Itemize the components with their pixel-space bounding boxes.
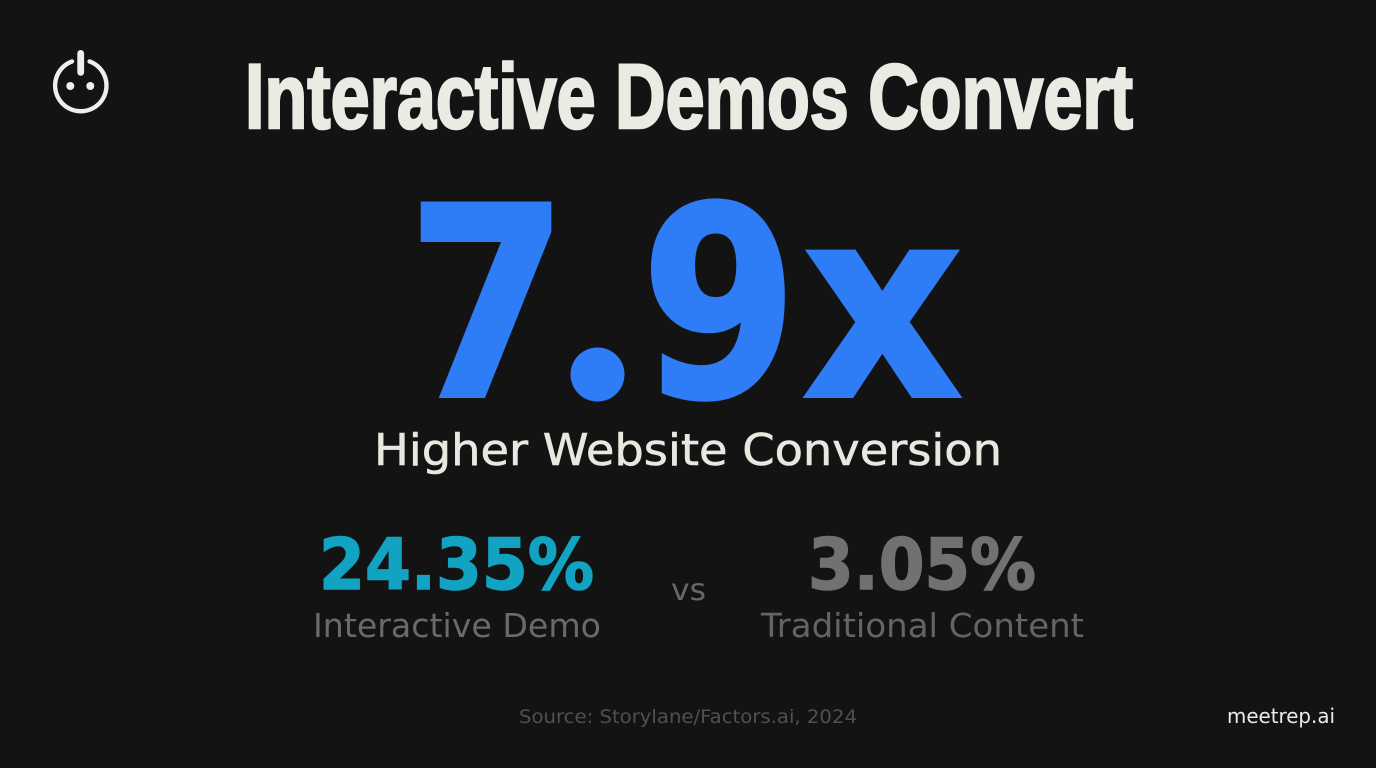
main statistic [407, 152, 962, 459]
vs label: vs [671, 573, 706, 608]
interactive demo value: 24.35% [319, 524, 594, 606]
title: Interactive Demos Convert [245, 46, 1133, 148]
source note: Source: Storylane/Factors.ai, 2024 [519, 706, 857, 728]
icon: power symbol with two dots [55, 50, 106, 111]
traditional content label: Traditional Content [760, 606, 1084, 645]
traditional content value: 3.05% [808, 524, 1036, 606]
interactive demo label: Interactive Demo [313, 606, 601, 645]
comparison: interactive demo [313, 524, 601, 645]
main statistic: 7 [407, 152, 568, 459]
brand: meetrep.ai [1227, 704, 1335, 728]
comparison: traditional content [760, 524, 1084, 645]
subtitle: Higher Website Conversion [374, 425, 1002, 476]
main statistic: x [802, 152, 962, 459]
main statistic: 9 [641, 152, 798, 459]
